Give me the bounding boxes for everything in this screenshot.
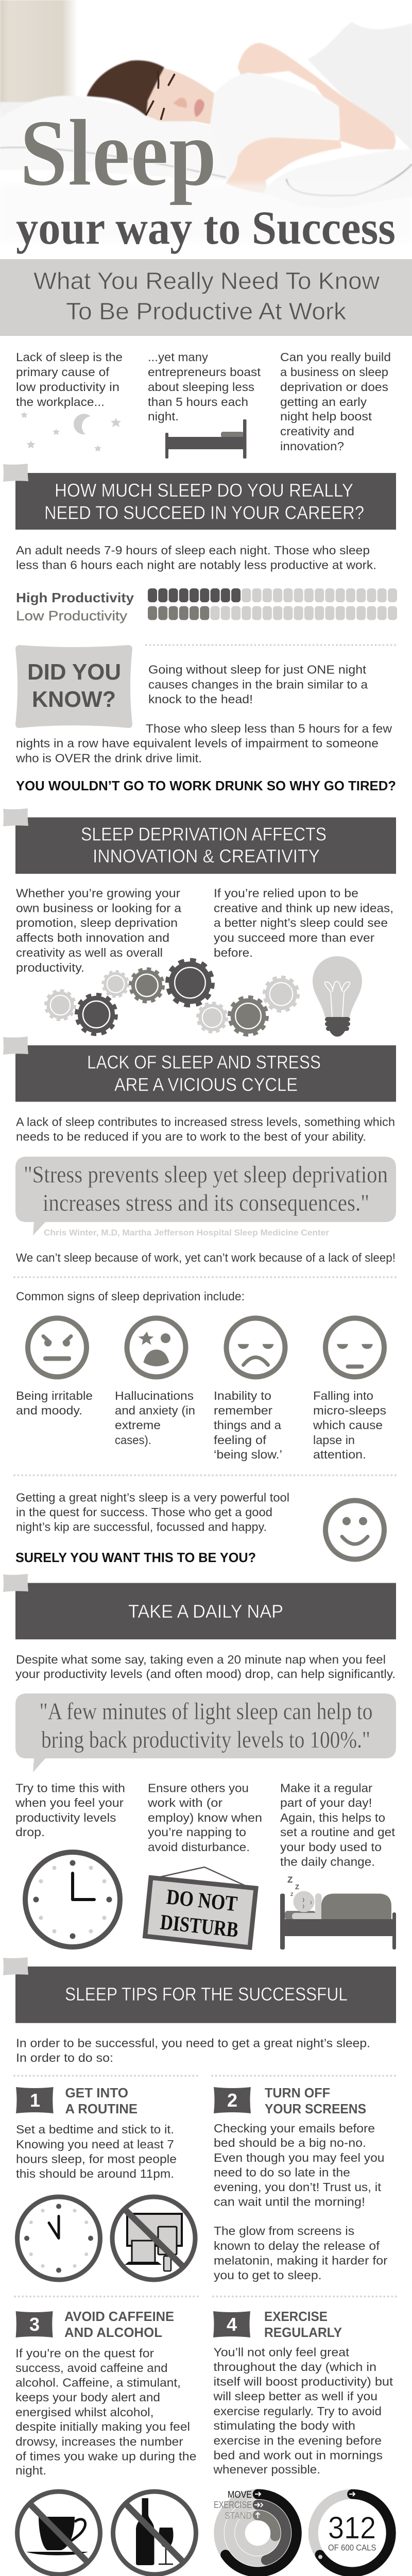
heading: how much sleep	[3, 464, 396, 530]
tip 3: heading	[16, 2309, 174, 2340]
intro column 1: Lack of sleep is the	[16, 350, 123, 364]
caption: micro-sleeps: lapse in	[313, 1433, 355, 1447]
text: vicious cycle line: We can’t sleep because of work, yet can’t work because of a lack of sleep!	[16, 1251, 396, 1264]
text: nap tip 3	[280, 1782, 396, 1868]
tip 3: text: alcohol. Caffeine, a stimulant,	[15, 2376, 181, 2389]
caption: micro-sleeps	[313, 1389, 386, 1461]
quote bubble: stress	[15, 1157, 396, 1235]
icon: wall clock at three	[25, 1852, 120, 1947]
text: nap tip 3: your body used to	[280, 1840, 382, 1854]
tip 4: text: You’ll not only feel great	[213, 2345, 350, 2359]
intro column 1	[16, 350, 123, 409]
tip 3: text	[15, 2346, 196, 2477]
text: innovation right: If you’re relied upon to be	[214, 886, 358, 900]
text: did you know facts: knock to the head!	[148, 692, 253, 706]
text: powerful tool: Getting a great night’s sleep is a very powerful tool	[16, 1491, 289, 1504]
callout: drunk or tired: YOU WOULDN’T GO TO WORK DRUNK SO WHY GO TIRED?	[16, 778, 396, 793]
text: innovation left	[16, 886, 181, 974]
icon: no coffee	[18, 2492, 100, 2574]
caption: irritable: Being irritable	[16, 1389, 93, 1402]
caption: memory	[214, 1389, 282, 1461]
text: innovation left: creativity as well as overall	[16, 946, 163, 959]
text: adult sleep need: An adult needs 7-9 hours of sleep each night. Those who sleep	[16, 544, 370, 557]
heading: innovation and creativity: INNOVATION & CREATIVITY	[93, 845, 320, 867]
tip 3: text: success, avoid caffeine and	[15, 2361, 168, 2375]
tip 2: text: you to get to sleep.	[214, 2268, 321, 2282]
intro column 1: primary cause of	[16, 365, 110, 379]
icon: person napping in bed	[280, 1875, 396, 1950]
tip 2: heading: 2	[227, 2090, 237, 2111]
caption: memory: remember	[214, 1403, 272, 1417]
text: tips intro	[16, 2036, 370, 2064]
heading: daily nap: TAKE A DAILY NAP	[128, 1601, 283, 1622]
title: Sleep your way to Success: your way to Success	[16, 201, 396, 254]
icon: no alcohol	[113, 2492, 196, 2574]
text: stress levels: needs to be reduced if you are to work to the best of your ability.	[16, 1130, 366, 1143]
caption: memory: Inability to	[214, 1389, 271, 1402]
icon: smiling face	[325, 1500, 384, 1559]
tip 4: text: exercise in the evening before	[213, 2434, 382, 2447]
text: powerful tool: night’s kip are successful, focussed and happy.	[16, 1520, 267, 1533]
intro column 3	[280, 350, 391, 453]
chart: activity rings: MOVE	[228, 2489, 252, 2500]
tip 4: heading: 4	[227, 2314, 237, 2335]
tip 1: text: hours sleep, for most people	[16, 2153, 177, 2166]
text: nap tip 3: part of your day!	[280, 1796, 372, 1809]
text: innovation left: promotion, sleep deprivation	[16, 916, 178, 929]
text: tips intro: In order to be successful, you need to get a great night’s sleep.	[16, 2036, 370, 2049]
icon: bed	[165, 419, 246, 459]
icon: do not disturb sign	[145, 1867, 256, 1947]
text: nap tip 1: drop.	[15, 1825, 45, 1839]
tip 3: heading: AVOID CAFFEINE	[64, 2309, 174, 2324]
caption: memory: ‘being slow.’	[214, 1448, 282, 1461]
quote bubble: stress: increases stress and its consequences."	[43, 1190, 369, 1216]
intro column 3: creativity and	[280, 425, 354, 438]
tip 1: heading: A ROUTINE	[65, 2101, 138, 2116]
icon: gears	[46, 961, 298, 1034]
text: stress levels: A lack of sleep contributes to increased stress levels, something which	[16, 1115, 395, 1128]
intro column 2: night.	[148, 410, 179, 423]
intro column 1: the workplace...	[16, 395, 105, 409]
chart: productivity bars: Low Productivity	[16, 608, 127, 623]
tip 4: heading: EXERCISE	[264, 2309, 328, 2324]
intro column 3: Can you really build	[280, 350, 391, 364]
caption: memory: things and a	[214, 1418, 281, 1432]
chart: activity rings: STAND	[225, 2511, 252, 2521]
icon: moon and stars	[21, 412, 121, 451]
text: nap tip 1	[15, 1782, 125, 1839]
intro column 2: ...yet many	[148, 350, 209, 364]
tip 2: text: evening, you don’t! Trust us, it	[214, 2180, 382, 2194]
text: did you know facts: causes changes in the brain similar to a	[148, 678, 368, 691]
tip 1: heading: 1	[30, 2090, 40, 2111]
text: did you know facts: who is OVER the drink drive limit.	[15, 751, 202, 765]
text: did you know facts: Those who sleep less than 5 hours for a few	[146, 722, 392, 735]
tip 2: text: melatonin, making it harder for	[214, 2253, 388, 2267]
tip 2: text: can wait until the morning!	[214, 2195, 365, 2208]
tip 2: text: Even though you may feel you	[214, 2151, 384, 2164]
icon: clock at eleven	[18, 2197, 100, 2280]
icon: do not disturb sign: DISTURB	[159, 1910, 239, 1942]
heading: how much sleep: HOW MUCH SLEEP DO YOU REALLY	[55, 480, 353, 501]
text: innovation left: productivity.	[16, 961, 84, 974]
tip 3: heading: AND ALCOHOL	[64, 2325, 162, 2340]
icon: person napping in bed: Z	[295, 1883, 299, 1891]
chart: calories ring	[313, 2492, 391, 2572]
caption: irritable: and moody.	[16, 1403, 82, 1417]
tip 4: text: exercise regularly. Try to avoid	[213, 2404, 382, 2418]
intro column 2: about sleeping less	[148, 380, 254, 394]
tip 4: heading	[213, 2309, 342, 2340]
heading: sleep tips	[3, 1957, 396, 2023]
caption: hallucinations: and anxiety (in	[115, 1403, 195, 1417]
heading: stress cycle	[3, 1037, 396, 1101]
text: nap tip 2	[147, 1782, 262, 1854]
text: adult sleep need	[16, 544, 376, 572]
heading: innovation and creativity: SLEEP DEPRIVATION AFFECTS	[81, 823, 327, 845]
did you know pillow	[15, 645, 132, 728]
intro column 2	[148, 350, 261, 423]
icon: no screens	[112, 2197, 195, 2280]
tip 2: text	[214, 2122, 388, 2282]
text: nap tip 1: Try to time this with	[15, 1782, 125, 1795]
heading: stress cycle: ARE A VICIOUS CYCLE	[114, 1074, 298, 1095]
heading: sleep tips: SLEEP TIPS FOR THE SUCCESSFUL	[65, 1984, 348, 2005]
intro column 3: getting an early	[280, 395, 367, 409]
icon: sad face	[227, 1318, 285, 1377]
text: nap tip 2: you’re napping to	[148, 1825, 246, 1839]
tip 3: text: energised whilst alcohol,	[15, 2405, 153, 2419]
tip 4: heading: REGULARLY	[264, 2325, 342, 2340]
icon: person napping in bed: Z	[287, 1875, 293, 1885]
subtitle band: To Be Productive At Work	[66, 298, 347, 325]
tip 1: text	[16, 2123, 177, 2180]
heading: stress cycle: LACK OF SLEEP AND STRESS	[87, 1052, 321, 1073]
icon: do not disturb sign: DO NOT	[165, 1885, 238, 1916]
tip 3: text: of times you wake up during the	[15, 2449, 196, 2463]
text: did you know facts	[15, 663, 392, 765]
heading: daily nap	[3, 1574, 396, 1639]
tip 4: text: stimulating the body with	[213, 2419, 355, 2432]
quote bubble: light sleep	[15, 1693, 396, 1772]
caption: micro-sleeps: attention.	[313, 1448, 366, 1461]
text: nap tip 2: Ensure others you	[148, 1782, 249, 1795]
tip 3: heading: 3	[29, 2314, 40, 2335]
tip 3: text: keeps your body alert and	[15, 2391, 160, 2404]
tip 4: text: itself will boost productivity) but	[213, 2375, 393, 2388]
title: Sleep your way to Success: Sleep	[20, 100, 217, 206]
tip 4: text: throughout the day (which in	[213, 2360, 376, 2374]
text: nap benefit	[15, 1653, 396, 1681]
tip 4: text: whenever possible.	[213, 2463, 320, 2476]
text: powerful tool: in the quest for success. Those who get a good	[16, 1505, 272, 1519]
intro column 3: deprivation or does	[280, 380, 388, 394]
tip 1: text: this should be around 11pm.	[16, 2167, 174, 2180]
text: innovation right	[214, 886, 393, 959]
text: nap tip 2: avoid disturbance.	[148, 1840, 250, 1854]
subtitle band: What You Really Need To Know	[33, 267, 380, 294]
text: innovation left: own business or looking for a	[16, 902, 181, 915]
caption: hallucinations: extreme	[115, 1418, 161, 1432]
icon: hallucinating face	[127, 1318, 185, 1377]
tip 3: text: night.	[15, 2464, 46, 2477]
text: nap tip 3: Again, this helps to	[280, 1811, 385, 1824]
intro column 2: entrepreneurs boast	[148, 365, 261, 379]
intro column 2: than 5 hours each	[148, 395, 248, 409]
icon: light bulb	[313, 956, 362, 1037]
text: tips intro: In order to do so:	[16, 2051, 113, 2064]
text: powerful tool	[16, 1491, 289, 1533]
intro column 3: innovation?	[280, 439, 344, 453]
tip 4: text	[213, 2345, 393, 2476]
tip 2: heading: TURN OFF	[265, 2085, 330, 2100]
text: nap benefit: Despite what some say, taking even a 20 minute nap when you feel	[16, 1653, 386, 1666]
text: nap tip 2: work with (or	[147, 1796, 222, 1809]
tip 1: text: Set a bedtime and stick to it.	[16, 2123, 174, 2136]
title: Sleep your way to Success	[16, 100, 396, 254]
text: nap tip 1: when you feel your	[15, 1796, 124, 1809]
text: adult sleep need: less than 6 hours each night are notably less productive at work.	[16, 558, 376, 572]
text: stress levels	[16, 1115, 395, 1143]
callout: surely: SURELY YOU WANT THIS TO BE YOU?	[15, 1550, 256, 1565]
tip 4: text: bed and work out in mornings	[213, 2448, 383, 2462]
quote attribution: Chris Winter, M.D, Martha Jefferson Hospital Sleep Medicine Center	[44, 1228, 329, 1238]
heading: how much sleep: NEED TO SUCCEED IN YOUR CAREER?	[44, 502, 364, 523]
text: did you know facts: nights in a row have equivalent levels of impairment to someone	[16, 737, 379, 750]
text: innovation left: affects both innovation and	[16, 931, 169, 944]
tip 2: text: known to delay the release of	[214, 2239, 380, 2252]
heading: innovation and creativity	[3, 808, 396, 874]
tip 1: text: Knowing you need at least 7	[16, 2138, 174, 2151]
caption: micro-sleeps: micro-sleeps	[313, 1403, 386, 1417]
tip 4: text: will sleep better as well if you	[213, 2389, 377, 2403]
icon: person napping in bed: Z	[290, 1892, 294, 1897]
chart: activity rings: EXERCISE	[214, 2500, 252, 2510]
tip 1: heading	[16, 2085, 138, 2116]
chart: productivity bars	[16, 588, 397, 623]
tip 3: text: despite initially making you feel	[15, 2420, 190, 2433]
chart: calories ring: OF 600 CALS	[328, 2543, 376, 2552]
icon: irritable face	[28, 1318, 87, 1377]
caption: micro-sleeps: which cause	[313, 1418, 383, 1432]
text: common signs: Common signs of sleep deprivation include:	[16, 1290, 245, 1303]
tip 2: heading	[214, 2085, 366, 2116]
caption: memory: feeling of	[214, 1433, 267, 1447]
chart: productivity bars: High Productivity	[16, 590, 134, 605]
text: innovation right: before.	[214, 946, 253, 959]
icon: drowsy face	[325, 1318, 384, 1377]
text: nap benefit: your productivity levels (and often mood) drop, can help significantly.	[15, 1667, 396, 1681]
intro column 3: night help boost	[280, 410, 372, 423]
tip 2: text: Checking your emails before	[214, 2122, 375, 2135]
text: nap tip 3: set a routine and get	[280, 1825, 396, 1839]
hero photo: woman sleeping	[0, 0, 412, 259]
text: innovation right: a better night’s sleep could see	[214, 916, 388, 929]
intro column 3: a business on sleep	[280, 365, 388, 379]
caption: hallucinations: Hallucinations	[115, 1389, 194, 1402]
text: nap tip 3: the daily change.	[280, 1855, 375, 1868]
text: innovation left: Whether you’re growing your	[16, 886, 180, 900]
tip 2: heading: YOUR SCREENS	[265, 2101, 366, 2116]
did you know pillow: KNOW?	[32, 687, 116, 712]
chart: calories ring: 312	[328, 2511, 376, 2545]
text: innovation right: creative and think up new ideas,	[214, 902, 393, 915]
caption: hallucinations	[115, 1389, 195, 1447]
tip 3: text: If you’re on the quest for	[15, 2346, 154, 2360]
intro column 1: low productivity in	[16, 380, 119, 394]
tip 2: text: bed should be a big no-no.	[214, 2136, 366, 2149]
caption: micro-sleeps: Falling into	[313, 1389, 373, 1402]
text: nap tip 2: employ) know when	[148, 1811, 262, 1824]
tip 2: text: The glow from screens is	[214, 2224, 354, 2238]
tip 1: heading: GET INTO	[65, 2085, 128, 2100]
caption: hallucinations: cases).	[115, 1433, 151, 1447]
tip 2: text: need to do so late in the	[214, 2166, 350, 2179]
tip 3: text: drowsy, increases the number	[15, 2435, 183, 2448]
chart: activity rings	[214, 2489, 297, 2572]
caption: irritable	[16, 1389, 93, 1417]
text: innovation right: you succeed more than ever	[214, 931, 374, 944]
text: nap tip 1: productivity levels	[15, 1811, 116, 1824]
text: nap tip 3: Make it a regular	[280, 1782, 372, 1795]
text: did you know facts: Going without sleep for just ONE night	[148, 663, 367, 676]
subtitle band	[0, 259, 412, 336]
did you know pillow: DID YOU	[27, 659, 121, 685]
